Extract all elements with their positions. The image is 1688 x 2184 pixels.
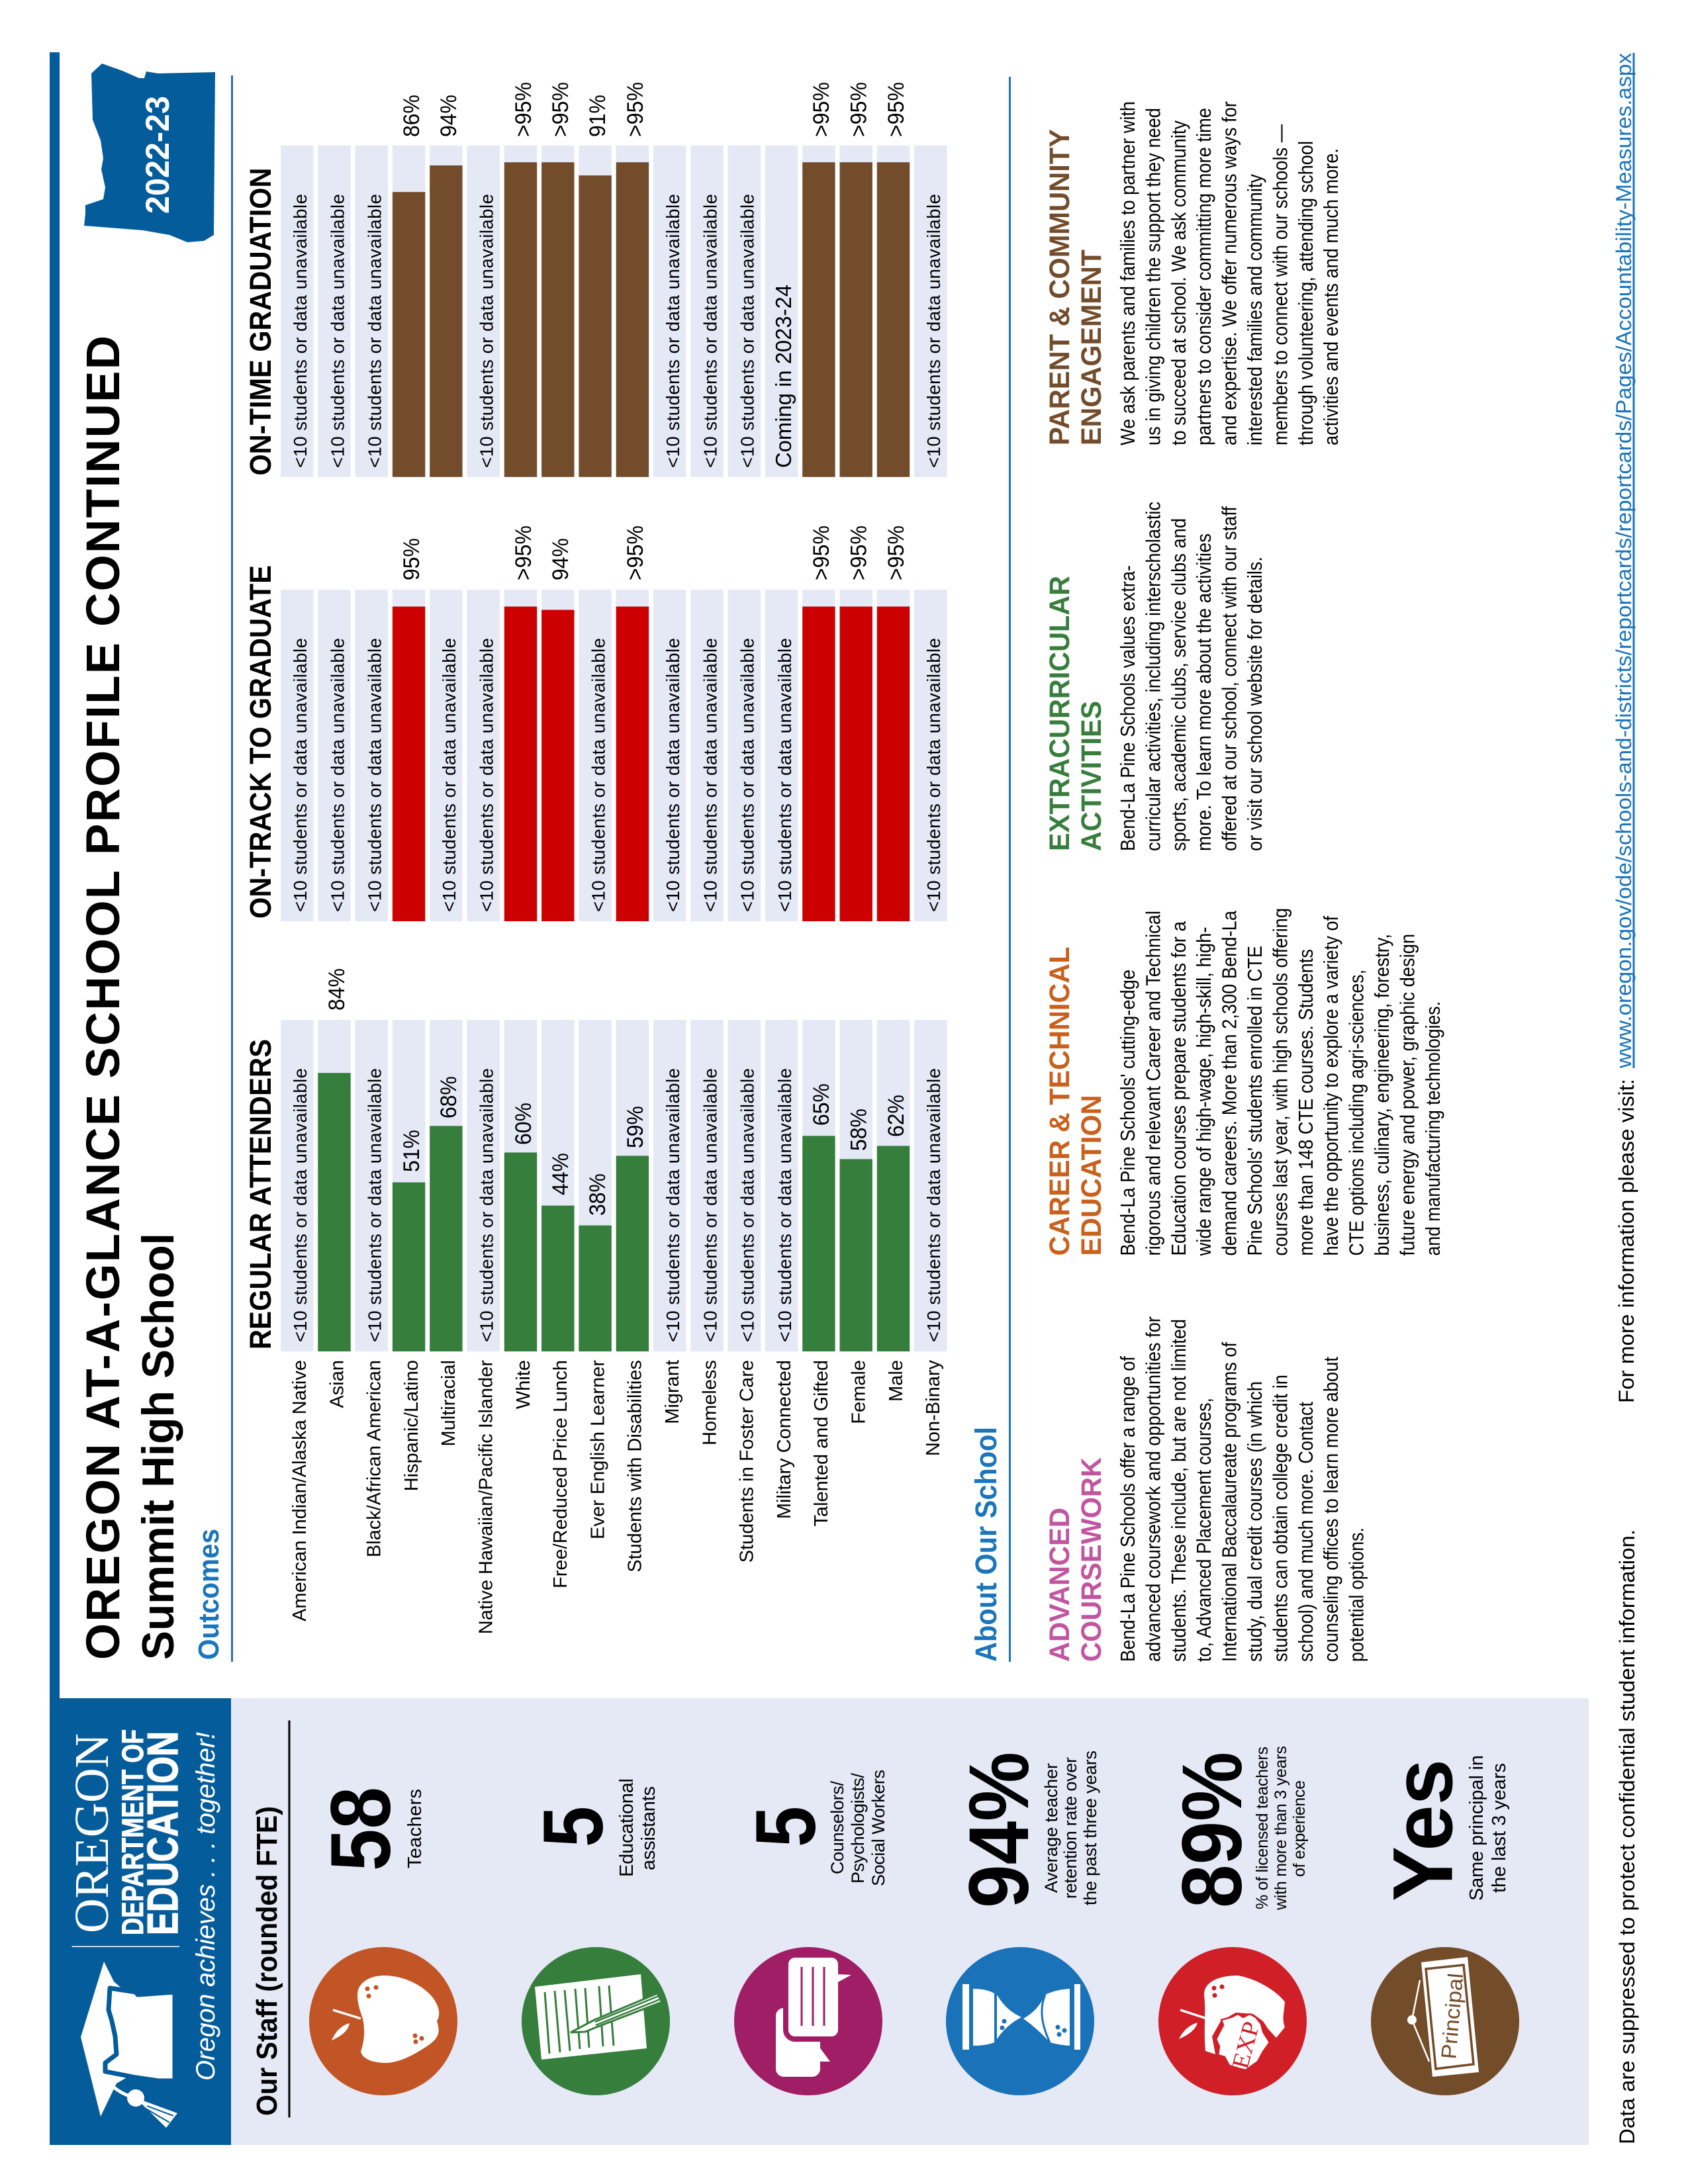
body text: career and technical education: CTE options including agri-sciences,	[1345, 970, 1368, 1256]
values: on-track: >95%	[511, 525, 536, 580]
section heading: career and technical education	[1044, 946, 1107, 1256]
values: regular attenders: 84%	[324, 968, 350, 1011]
body text: parent and community engagement: We ask parents and families to partner with	[1116, 101, 1139, 445]
body text: parent and community engagement: and expertise. We offer numerous ways for	[1218, 101, 1241, 445]
stat: educational assistants	[526, 1778, 659, 1877]
suppressed notes: regular attenders: <10 students or data unavailable	[923, 1068, 944, 1342]
section heading: extracurricular activities: ACTIVITIES	[1076, 701, 1107, 851]
body text: career and technical education: have the opportunity to explore a variety of	[1319, 916, 1342, 1256]
suppressed notes: on-time: <10 students or data unavailable	[365, 194, 385, 468]
body text: advanced coursework: students can obtain college credit in	[1268, 1375, 1291, 1662]
body text: advanced coursework: school) and much more. Contact	[1294, 1402, 1317, 1662]
values: regular attenders: 51%	[399, 1130, 424, 1172]
suppressed notes: on-track: <10 students or data unavailable	[327, 638, 348, 912]
values: regular attenders: 58%	[846, 1109, 871, 1151]
section heading: extracurricular activities	[1044, 576, 1107, 851]
row labels: Homeless	[699, 1360, 720, 1445]
body text: career and technical education: courses last year, with high schools offering	[1268, 908, 1291, 1256]
suppressed notes: regular attenders	[290, 1068, 944, 1342]
row labels: White	[513, 1360, 534, 1409]
values: regular attenders: 65%	[809, 1083, 834, 1126]
stat: licensed teachers experience: with more than 3 years	[1272, 1746, 1290, 1911]
row labels: Male	[886, 1360, 907, 1402]
section heading: advanced coursework: COURSEWORK	[1076, 1457, 1107, 1662]
section: parent and community engagement	[1044, 101, 1342, 445]
body text: parent and community engagement: through volunteering, attending school	[1294, 141, 1317, 445]
body text: advanced coursework: to, Advanced Placement courses,	[1192, 1398, 1215, 1662]
chart: on-time graduation	[244, 82, 947, 477]
stat: counselors	[739, 1770, 888, 1886]
year on map: 2022-23	[139, 96, 176, 214]
body text: advanced coursework	[1116, 1316, 1368, 1662]
body text: extracurricular activities	[1116, 502, 1266, 851]
suppressed notes: on-time	[290, 194, 944, 468]
stat: teachers: 58	[314, 1787, 408, 1871]
tracks: on-time	[281, 146, 947, 477]
bars: regular attenders	[318, 1073, 910, 1351]
section heading: parent and community engagement	[1044, 129, 1107, 445]
values: regular attenders: 44%	[548, 1153, 573, 1195]
suppressed notes: on-time: <10 students or data unavailable	[290, 194, 310, 468]
tracks: on-track	[281, 590, 947, 921]
tagline: Oregon achieves . . . together!	[191, 1732, 220, 2081]
section heading: parent and community engagement: PARENT & COMMUNITY	[1044, 129, 1076, 445]
suppressed notes: regular attenders: <10 students or data unavailable	[737, 1068, 758, 1342]
values: regular attenders: 60%	[511, 1103, 536, 1145]
suppressed notes: on-time: <10 students or data unavailable	[700, 194, 720, 468]
stat: counselors: Social Workers	[868, 1770, 888, 1886]
values: on-track: >95%	[846, 525, 871, 580]
footer note: suppression: Data are suppressed to protect confidential student information.	[1615, 1529, 1639, 2144]
values: on-time: >95%	[511, 82, 536, 137]
suppressed notes: on-time: <10 students or data unavailable	[327, 194, 348, 468]
row labels: Talented and Gifted	[811, 1360, 832, 1527]
icon: apple with EXP	[1158, 1947, 1307, 2095]
stat: educational assistants: Educational	[616, 1778, 637, 1877]
row labels: Black/African American	[364, 1360, 385, 1557]
panel: logo band	[50, 1698, 231, 2145]
suppressed notes: on-track: <10 students or data unavailable	[923, 638, 944, 912]
body text: career and technical education	[1116, 908, 1444, 1256]
panel: our staff	[231, 1698, 1589, 2145]
stat: licensed teachers experience: % of licensed teachers	[1253, 1747, 1272, 1909]
stat: counselors: 5	[739, 1806, 833, 1847]
school name: Summit High School	[133, 1233, 183, 1660]
body text: advanced coursework: International Baccalaureate programs of	[1218, 1342, 1241, 1662]
suppressed notes: on-track: <10 students or data unavailable	[737, 638, 758, 912]
heading: about our school: About Our School	[969, 1427, 1003, 1662]
row labels: Migrant	[662, 1360, 683, 1424]
body text: career and technical education: Pine Schools' students enrolled in CTE	[1243, 946, 1266, 1256]
body text: parent and community engagement: activities and events and much more.	[1319, 148, 1342, 445]
stat: licensed teachers experience: of experience	[1290, 1780, 1309, 1877]
row labels: Female	[849, 1360, 870, 1424]
values: on-time: 94%	[436, 95, 461, 137]
icon: apple	[309, 1947, 457, 2095]
values: on-time: >95%	[884, 82, 909, 137]
suppressed notes: on-track: <10 students or data unavailable	[588, 638, 608, 912]
values: regular attenders	[324, 968, 909, 1216]
stat: licensed teachers experience: 89%	[1165, 1752, 1260, 1908]
row labels: Free/Reduced Price Lunch	[550, 1360, 571, 1588]
suppressed notes: regular attenders: <10 students or data unavailable	[700, 1068, 720, 1342]
row labels: Native Hawaiian/Pacific Islander	[475, 1360, 496, 1634]
suppressed notes: on-time: <10 students or data unavailable	[737, 194, 758, 468]
chart: regular attenders	[244, 968, 947, 1351]
suppressed notes: on-track: <10 students or data unavailable	[290, 638, 310, 912]
suppressed notes: regular attenders: <10 students or data unavailable	[290, 1068, 310, 1342]
row labels: Asian	[326, 1360, 348, 1408]
body text: advanced coursework: students. These include, but are not limited	[1167, 1319, 1190, 1662]
values: on-time: >95%	[623, 82, 648, 137]
values: on-time	[399, 82, 909, 137]
chart heading: on-track: ON-TRACK TO GRADUATE	[244, 565, 277, 919]
body text: career and technical education: rigorous and relevant Career and Technical	[1141, 911, 1164, 1256]
values: on-time: 91%	[585, 95, 610, 137]
values: on-track: 95%	[399, 538, 424, 580]
body text: career and technical education: business, culinary, engineering, forestry,	[1370, 934, 1393, 1256]
stat: educational assistants: 5	[526, 1806, 621, 1847]
bars: on-track	[393, 606, 910, 921]
suppressed notes: on-track	[290, 638, 944, 912]
suppressed notes: on-track: <10 students or data unavailable	[439, 638, 459, 912]
suppressed notes: on-track: <10 students or data unavailable	[477, 638, 496, 912]
body text: extracurricular activities: Bend-La Pine Schools values extra-	[1116, 565, 1139, 851]
body text: parent and community engagement: to succeed at school. We ask community	[1167, 120, 1190, 445]
body text: career and technical education: Education courses prepare students for a	[1167, 921, 1190, 1256]
values: on-track: >95%	[809, 525, 834, 580]
suppressed notes: regular attenders: <10 students or data unavailable	[477, 1068, 496, 1342]
section heading: extracurricular activities: EXTRACURRICULAR	[1044, 576, 1076, 851]
section heading: career and technical education: EDUCATION	[1076, 1095, 1107, 1256]
row labels: Non-Binary	[923, 1360, 944, 1456]
values: regular attenders: 62%	[884, 1095, 909, 1137]
stat: licensed teachers experience	[1165, 1746, 1309, 1911]
body text: advanced coursework: Bend-La Pine Schools offer a range of	[1116, 1356, 1139, 1662]
suppressed notes: on-track: <10 students or data unavailable	[774, 638, 795, 912]
row labels: Ever English Learner	[587, 1360, 608, 1539]
footer link: www.oregon.gov/ode/schools-and-districts/reportcards/reportcards/Pages/Accountability-Measures.aspx	[1612, 53, 1636, 1069]
body text: advanced coursework: advanced coursework and opportunities for	[1141, 1316, 1164, 1662]
icon: graduation cap and Oregon logo	[81, 1962, 177, 2128]
row labels	[289, 1360, 944, 1634]
stat: educational assistants: assistants	[638, 1786, 659, 1870]
body text: parent and community engagement: us in giving children the support they need	[1141, 108, 1164, 445]
values: on-track	[399, 525, 909, 580]
row labels: Students in Foster Care	[737, 1360, 758, 1563]
icon: speech bubbles	[734, 1947, 882, 2095]
values: on-track: 94%	[548, 538, 573, 580]
heading: outcomes: Outcomes	[193, 1529, 225, 1660]
values: on-time: >95%	[809, 82, 834, 137]
row labels: Military Connected	[774, 1360, 795, 1519]
row labels: Hispanic/Latino	[401, 1360, 422, 1491]
values: on-time: >95%	[548, 82, 573, 137]
values: on-time: 86%	[399, 95, 424, 137]
suppressed notes: on-time: <10 students or data unavailable	[663, 194, 683, 468]
icon: principal sign	[1371, 1947, 1519, 2095]
suppressed notes: regular attenders: <10 students or data unavailable	[774, 1068, 795, 1342]
section heading: career and technical education: CAREER & TECHNICAL	[1044, 946, 1076, 1256]
values: on-track: >95%	[623, 525, 648, 580]
title: OREGON AT-A-GLANCE SCHOOL PROFILE CONTINUED	[77, 336, 130, 1660]
icon: apple with EXP: EXP	[1227, 2019, 1264, 2071]
values: on-track: >95%	[884, 525, 909, 580]
icon: principal sign: Principal	[1436, 1972, 1468, 2060]
suppressed notes: on-time: <10 students or data unavailable	[923, 194, 944, 468]
icon: Oregon map with year	[84, 64, 215, 242]
values: regular attenders: 68%	[436, 1076, 461, 1118]
row labels: Students with Disabilities	[625, 1360, 646, 1572]
tracks: regular attenders	[281, 1020, 947, 1351]
body text: extracurricular activities: more. To learn more about the activities	[1192, 533, 1215, 851]
chart: on-track to graduate	[244, 525, 947, 921]
body text: parent and community engagement: members to connect with our schools —	[1268, 124, 1291, 445]
section heading: advanced coursework: ADVANCED	[1044, 1508, 1076, 1662]
suppressed notes: on-time: <10 students or data unavailable	[477, 194, 496, 468]
row labels: American Indian/Alaska Native	[289, 1360, 310, 1621]
logo wordmark: Department of: DEPARTMENT OF	[116, 1729, 150, 1935]
body text: career and technical education: and manufacturing technologies.	[1421, 1001, 1444, 1256]
stat: teacher retention	[952, 1751, 1100, 1908]
row labels: Multiracial	[438, 1360, 459, 1447]
body text: advanced coursework: counseling offices to learn more about	[1319, 1357, 1342, 1662]
chart heading: regular attenders: REGULAR ATTENDERS	[244, 1039, 277, 1349]
footer note: more information: For more information please visit:	[1615, 1079, 1638, 1403]
stat: same principal: Yes	[1376, 1759, 1471, 1901]
section: extracurricular activities	[1044, 502, 1266, 851]
body text: extracurricular activities: sports, academic clubs, service clubs and	[1167, 518, 1190, 851]
body text: career and technical education: future energy and power, graphic design	[1395, 934, 1419, 1256]
section: advanced coursework	[1044, 1316, 1368, 1662]
stat: counselors: Counselors/	[827, 1781, 847, 1874]
stat: counselors: Psychologists/	[848, 1773, 868, 1884]
stat: same principal: Same principal in	[1466, 1755, 1487, 1901]
values: regular attenders: 59%	[623, 1106, 648, 1148]
suppressed notes: regular attenders: <10 students or data unavailable	[365, 1068, 385, 1342]
suppressed notes: on-track: <10 students or data unavailable	[365, 638, 385, 912]
chart heading: on-time: ON-TIME GRADUATION	[244, 168, 277, 475]
body text: career and technical education: Bend-La Pine Schools' cutting-edge	[1116, 970, 1139, 1256]
top page rule	[50, 52, 60, 1699]
body text: career and technical education: wide range of high-wage, high-skill, high-	[1192, 927, 1215, 1256]
section heading: parent and community engagement: ENGAGEMENT	[1076, 250, 1107, 445]
values: regular attenders: 38%	[585, 1173, 610, 1216]
body text: career and technical education: demand careers. More than 2,300 Bend-La	[1218, 910, 1241, 1256]
body text: extracurricular activities: curricular activities, including interscholastic	[1141, 502, 1164, 851]
body text: parent and community engagement: partners to consider committing more time	[1192, 108, 1215, 445]
section: career and technical education	[1044, 908, 1444, 1256]
body text: parent and community engagement: interested families and community	[1243, 174, 1266, 445]
body text: parent and community engagement	[1116, 101, 1342, 445]
suppressed notes: on-track: <10 students or data unavailable	[700, 638, 720, 912]
stat: teacher retention: 94%	[952, 1752, 1047, 1908]
stat: same principal: the last 3 years	[1489, 1763, 1510, 1893]
body text: extracurricular activities: or visit our school website for details.	[1243, 557, 1266, 851]
stat: teacher retention: the past three years	[1080, 1751, 1100, 1905]
icon: hourglass	[946, 1947, 1094, 2095]
logo wordmark: Oregon: OREGON	[65, 1733, 118, 1933]
values: on-time: >95%	[846, 82, 871, 137]
suppressed notes: regular attenders: <10 students or data unavailable	[663, 1068, 683, 1342]
stat: teacher retention: retention rate over	[1060, 1757, 1080, 1899]
logo wordmark: Education: EDUCATION	[138, 1731, 187, 1935]
body text: advanced coursework: study, dual credit courses (in which	[1243, 1381, 1266, 1662]
staff heading: Our Staff (rounded FTE)	[251, 1806, 283, 2116]
suppressed notes: on-time: Coming in 2023-24	[771, 285, 796, 468]
bars: on-time	[393, 162, 910, 477]
suppressed notes: on-track: <10 students or data unavailable	[663, 638, 683, 912]
body text: extracurricular activities: offered at our school, connect with our staff	[1218, 506, 1241, 851]
stat: teacher retention: Average teacher	[1041, 1763, 1061, 1893]
stat: teachers: Teachers	[404, 1789, 426, 1868]
body text: career and technical education: more than 148 CTE courses. Students	[1294, 949, 1317, 1256]
section heading: advanced coursework	[1044, 1457, 1107, 1662]
body text: advanced coursework: potential options.	[1345, 1527, 1368, 1662]
icon: notepad and pencil	[522, 1947, 670, 2095]
